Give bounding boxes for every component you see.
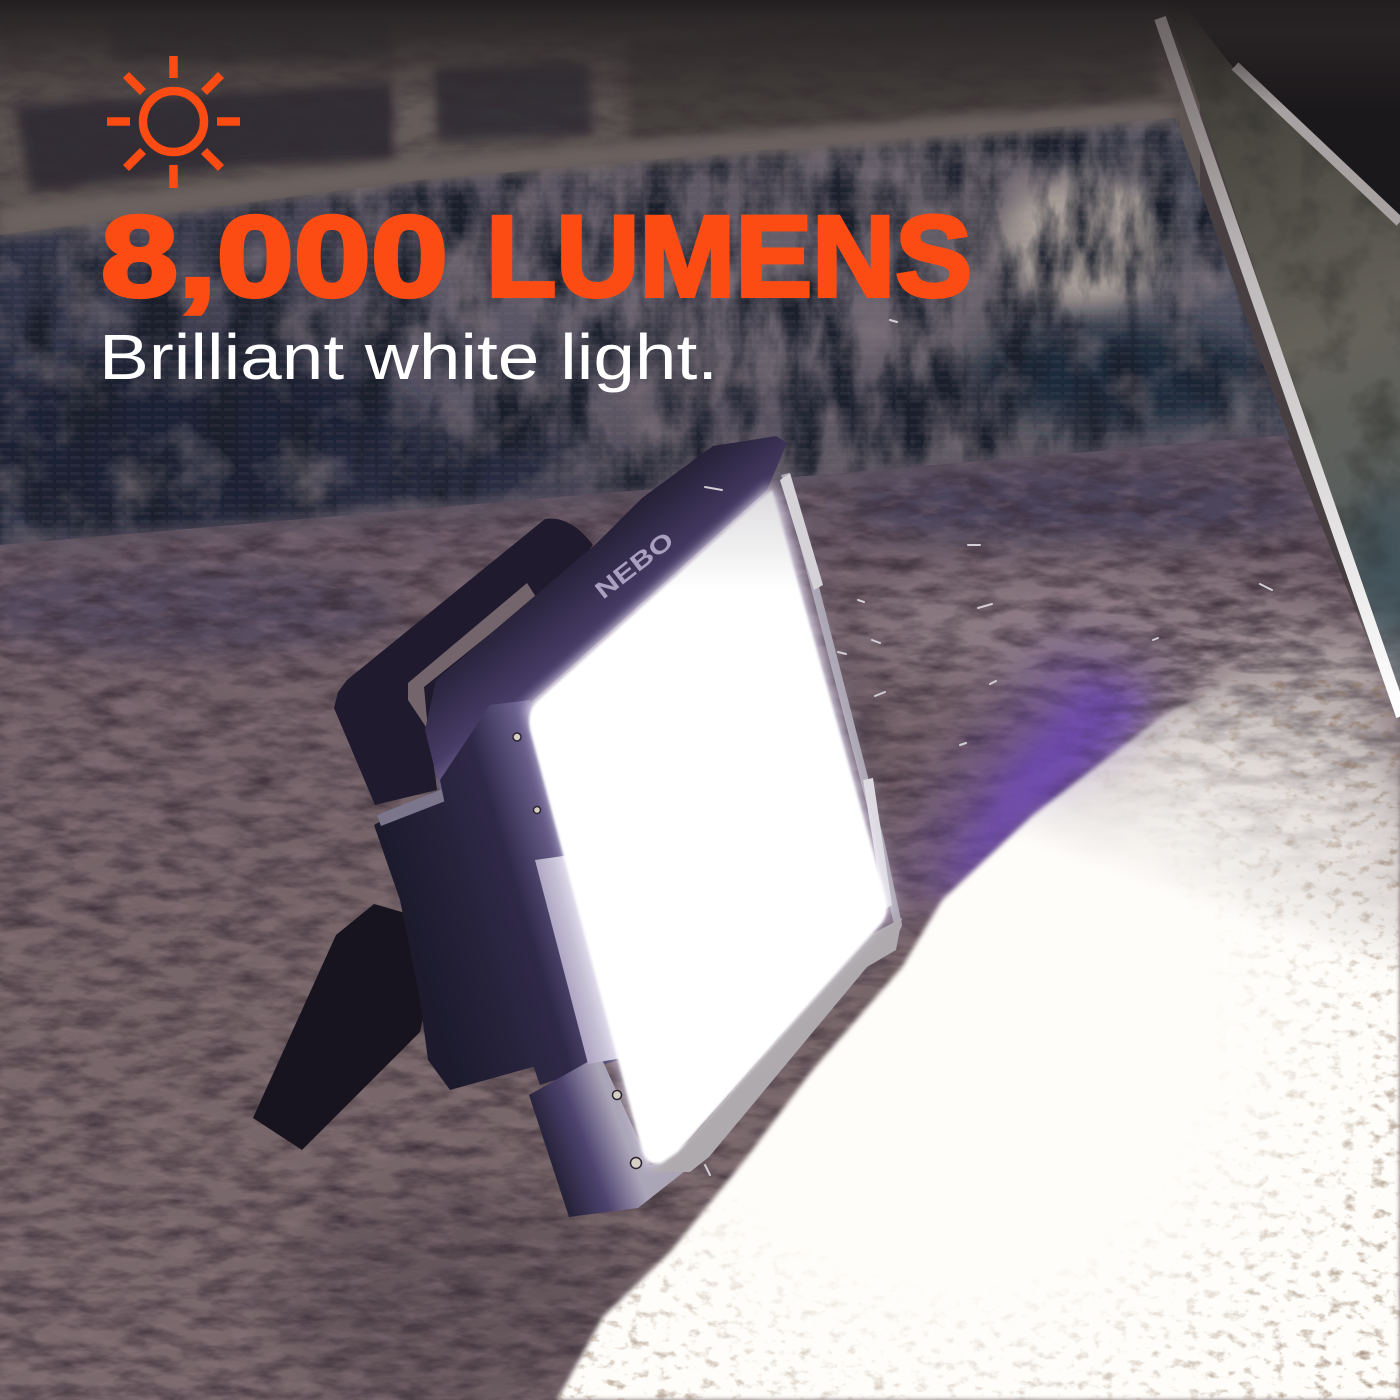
work light product <box>253 436 902 1217</box>
main housing side <box>440 700 618 1085</box>
upper arm of housing <box>425 436 787 790</box>
upper side latch <box>780 473 823 590</box>
lower housing <box>529 1055 709 1217</box>
hinge cylinder <box>374 780 600 1090</box>
bright pool <box>557 640 1400 1400</box>
upper brick wall <box>0 0 1200 240</box>
silver frame side <box>535 855 622 1064</box>
silver frame bottom edge <box>650 918 902 1172</box>
purple light haze <box>890 640 1170 900</box>
silver frame right edge <box>785 474 898 950</box>
lower side latch <box>863 778 892 910</box>
floating dust specks <box>705 320 1272 1175</box>
kickstand foot <box>253 904 437 1150</box>
wall base line <box>0 434 1285 548</box>
sun ring <box>143 91 204 152</box>
title: LUMENS <box>486 193 972 321</box>
band on hinge <box>377 788 448 826</box>
screws <box>513 733 642 1168</box>
subtitle: Brilliant white light. <box>99 321 718 393</box>
top shadow band <box>0 0 1400 110</box>
pool surface specks <box>500 680 1400 1400</box>
glow around panel <box>520 480 895 1170</box>
title <box>101 193 972 321</box>
LED panel halo <box>530 490 886 1162</box>
icon: sun <box>107 56 240 188</box>
light pool on floor <box>554 576 1400 1400</box>
mortar band <box>0 104 1175 238</box>
handle inner opening <box>408 583 536 730</box>
bright diagonal ledge line <box>1160 18 1400 716</box>
handle outer loop <box>334 519 593 805</box>
mottled light falloff <box>1100 640 1400 880</box>
LED panel <box>529 490 887 1164</box>
floor <box>0 430 1400 1400</box>
sun rays <box>107 56 240 188</box>
title: 8,000 <box>101 193 448 321</box>
NEBO logo: NEBO <box>590 527 679 605</box>
lower dark wall <box>0 118 1290 545</box>
right concrete column <box>1181 20 1400 691</box>
